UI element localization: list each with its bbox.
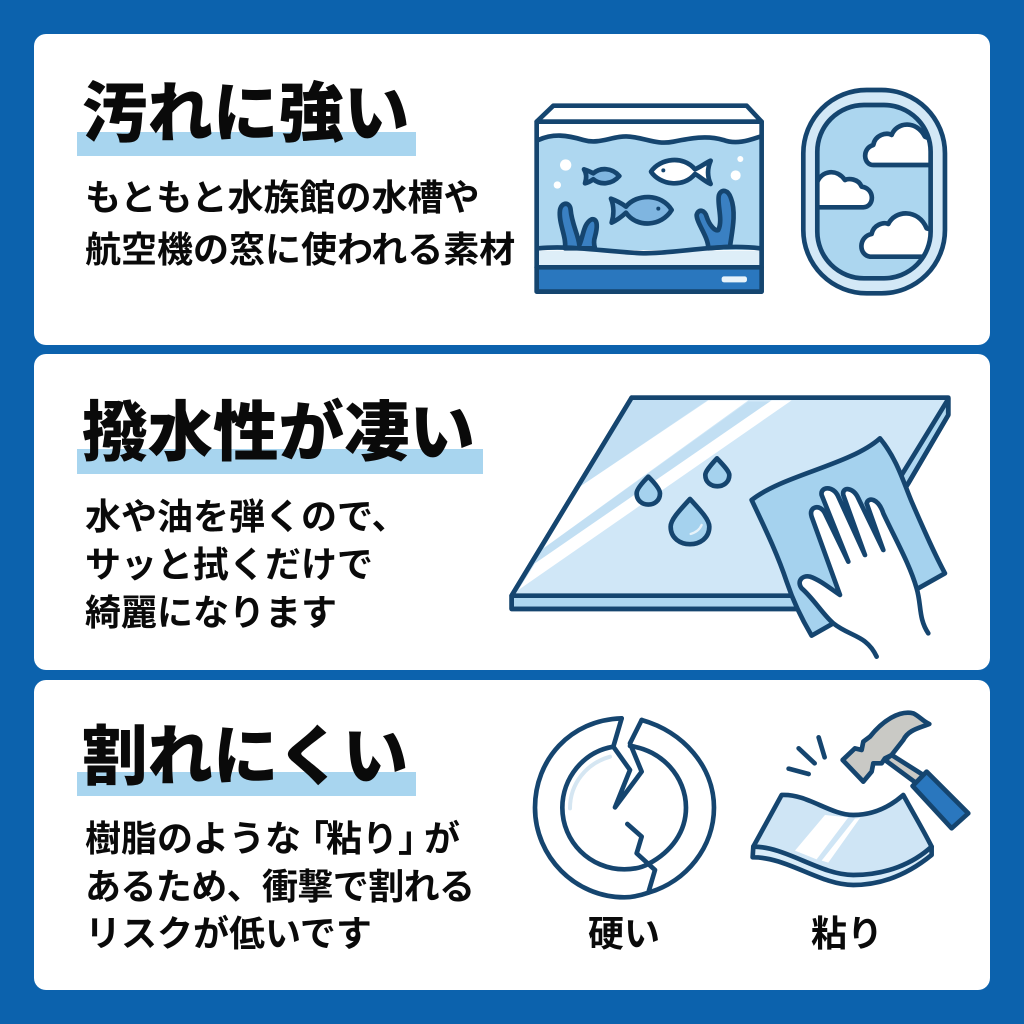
cloth: [752, 438, 945, 636]
hand: [800, 488, 928, 657]
body text: water repellency: [85, 496, 408, 633]
seaweed right: [697, 191, 734, 248]
hammer head: [843, 713, 929, 782]
body text: shatter resistance: 」: [398, 818, 434, 859]
body text: stain resistance: 航空機の窓に使われる素材: [85, 229, 515, 270]
impact lines: [789, 737, 825, 774]
fish: blue: [611, 197, 672, 223]
body text: water repellency: 綺麗になります: [85, 592, 337, 633]
body text: shatter resistance: あるため、衝撃で割れる: [85, 866, 474, 907]
heading: stain resistance: 汚れに強い: [82, 77, 410, 150]
icon: cracked hard plate: [535, 718, 714, 897]
seaweed left: [560, 204, 597, 248]
heading: shatter resistance: 割れにくい: [82, 720, 408, 793]
body text: shatter resistance: リスクが低いです: [85, 913, 372, 954]
body text: shatter resistance: 粘り: [326, 818, 398, 859]
water drops: [637, 477, 660, 505]
heading: water repellency: 撥水性が凄い: [82, 396, 475, 469]
heading highlight: [77, 132, 416, 156]
body text: water repellency: 水や油を弾くので、: [85, 496, 408, 537]
body text: shatter resistance: 「: [293, 818, 329, 859]
glass panel: [512, 398, 948, 609]
body text: shatter resistance: 樹脂のような: [85, 818, 301, 859]
icon: glass panel with wiping hand: [512, 398, 948, 657]
icon: aquarium: [537, 106, 762, 292]
panel: water repellency: [34, 354, 990, 670]
label: hard: 硬い: [588, 913, 660, 954]
panel: stain resistance: [34, 34, 990, 345]
body text: stain resistance: [85, 177, 515, 270]
hammer handle: [885, 755, 923, 783]
flexible sheet: [753, 847, 932, 885]
icon: airplane window: [803, 90, 945, 293]
heading highlight: [77, 449, 483, 474]
label: tenacious: 粘り: [811, 913, 883, 954]
fish: small: [584, 169, 619, 183]
body text: water repellency: サッと拭くだけで: [85, 544, 373, 585]
body text: shatter resistance: が: [424, 818, 460, 859]
body text: shatter resistance: [85, 818, 474, 954]
clouds: [865, 125, 933, 165]
icon: hammer and flexible sheet: [753, 713, 968, 885]
fish: white: [651, 160, 711, 184]
bubbles: [554, 156, 743, 189]
heading highlight: [77, 772, 416, 796]
body text: stain resistance: もともと水族館の水槽や: [85, 177, 480, 218]
panel: shatter resistance: [34, 680, 990, 990]
